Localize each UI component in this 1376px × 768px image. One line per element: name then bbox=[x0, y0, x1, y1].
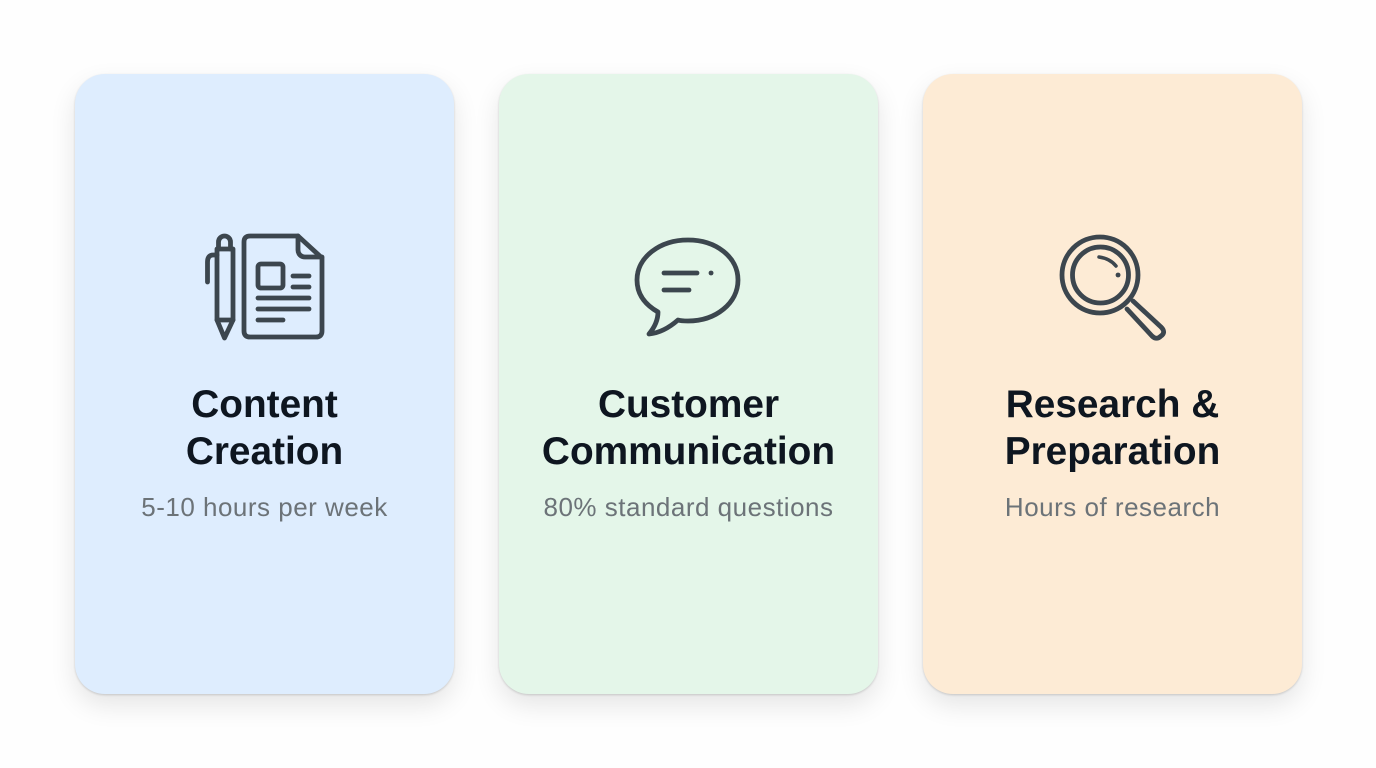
heading: research and preparation: Preparation bbox=[1005, 430, 1220, 473]
text: hours of research: Hours of research bbox=[1005, 492, 1220, 522]
heading: research and preparation bbox=[1005, 383, 1220, 473]
text: hours per week: 5-10 hours per week bbox=[141, 492, 388, 522]
panel: customer communication bbox=[499, 74, 878, 694]
heading: content creation bbox=[186, 383, 343, 473]
icon: pen and document bbox=[208, 236, 322, 338]
heading: customer communication bbox=[542, 383, 835, 473]
panel: research and preparation bbox=[923, 74, 1302, 694]
heading: content creation: Content bbox=[191, 383, 338, 426]
heading: customer communication: Communication bbox=[542, 430, 835, 473]
heading: research and preparation: Research & bbox=[1006, 383, 1219, 426]
text: standard questions: 80% standard questions bbox=[544, 492, 833, 522]
icon: speech bubble bbox=[637, 240, 738, 334]
heading: content creation: Creation bbox=[186, 430, 343, 473]
icon: magnifying glass bbox=[1062, 237, 1164, 338]
heading: customer communication: Customer bbox=[598, 383, 779, 426]
panel: content creation bbox=[75, 74, 454, 694]
